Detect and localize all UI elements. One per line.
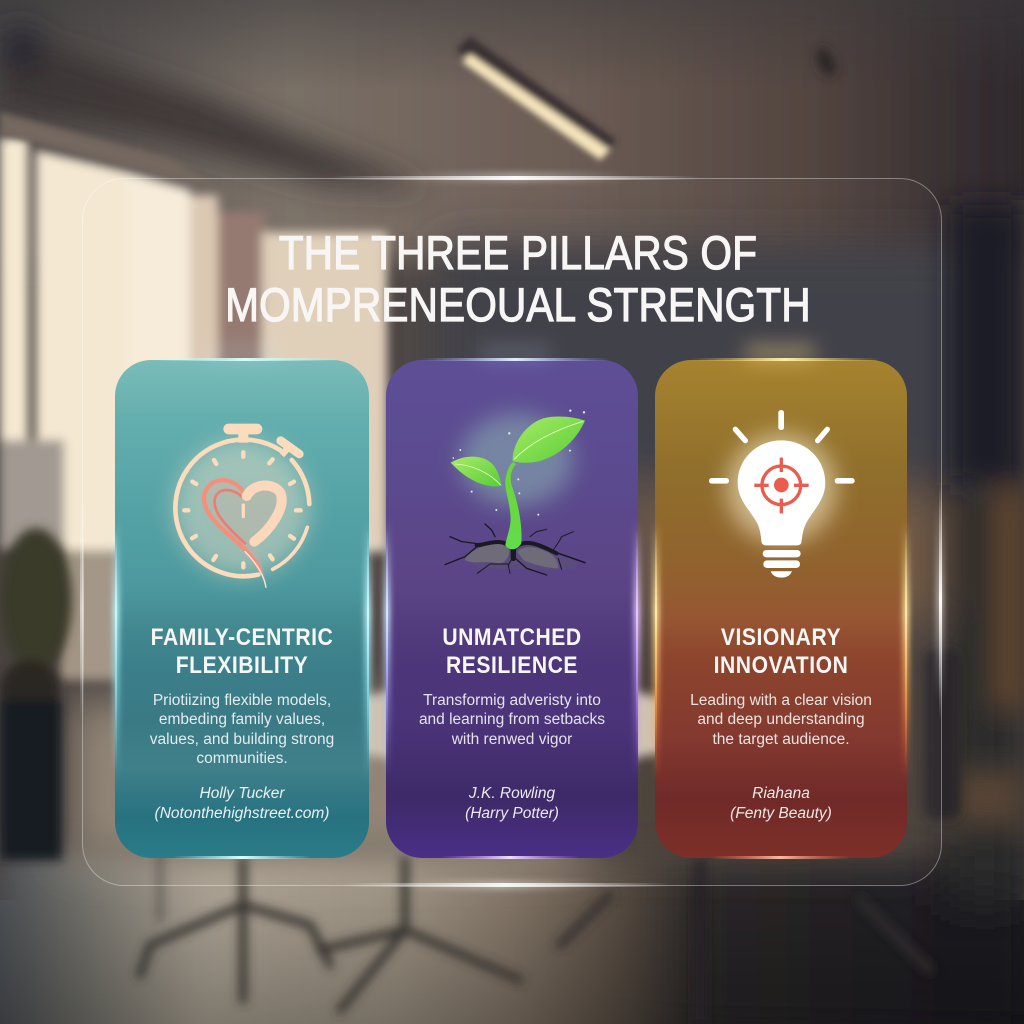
card description: with renwed vigor: [452, 731, 572, 748]
ceiling light: [456, 36, 616, 160]
card description: the target audience.: [712, 731, 850, 748]
card: visionary innovation: [655, 360, 907, 858]
icon: stopwatch with heart: [173, 429, 310, 587]
card heading: UNMATCHED: [442, 624, 582, 651]
card attribution: (Notonthehighstreet.com): [155, 805, 329, 822]
card heading: RESILIENCE: [446, 652, 578, 679]
beam above window: [0, 112, 215, 185]
title: [225, 226, 811, 331]
card description: Leading with a clear vision: [690, 692, 872, 709]
card description: and deep understanding: [697, 711, 865, 728]
card heading: FLEXIBILITY: [176, 652, 308, 679]
card attribution: J.K. Rowling: [469, 785, 555, 802]
card description: [690, 692, 872, 748]
card description: Priotiizing flexible models,: [153, 692, 331, 709]
card heading: [714, 624, 848, 679]
title: MOMPRENEOUAL STRENGTH: [225, 278, 811, 331]
glass panel: [82, 178, 942, 886]
icon: sprout in cracked ground: [445, 409, 585, 575]
card heading: [151, 624, 333, 679]
card attribution: (Harry Potter): [465, 805, 559, 822]
card attribution: [730, 785, 832, 822]
window light: [0, 138, 387, 680]
card attribution: (Fenty Beauty): [730, 805, 832, 822]
card heading: FAMILY-CENTRIC: [151, 624, 333, 651]
table and chairs: [310, 650, 961, 820]
card description: [419, 692, 605, 748]
card attribution: [155, 785, 329, 822]
card: unmatched resilience: [386, 360, 638, 858]
card attribution: [465, 785, 559, 822]
card description: and learning from setbacks: [419, 711, 605, 728]
card description: communities.: [196, 750, 288, 767]
card description: [150, 692, 334, 767]
card description: values, and building strong: [150, 731, 334, 748]
card heading: INNOVATION: [714, 652, 848, 679]
edge glows: [80, 172, 944, 890]
card description: Transformig adveristy into: [423, 692, 601, 709]
office plant: [0, 528, 72, 860]
card: family-centric flexibility: [115, 360, 369, 858]
icon: light bulb with target: [709, 410, 855, 578]
card heading: VISIONARY: [721, 624, 841, 651]
card heading: [442, 624, 582, 679]
card attribution: Riahana: [752, 785, 810, 802]
title: THE THREE PILLARS OF: [279, 226, 757, 279]
card attribution: Holly Tucker: [200, 785, 284, 802]
card description: embeding family values,: [159, 711, 325, 728]
